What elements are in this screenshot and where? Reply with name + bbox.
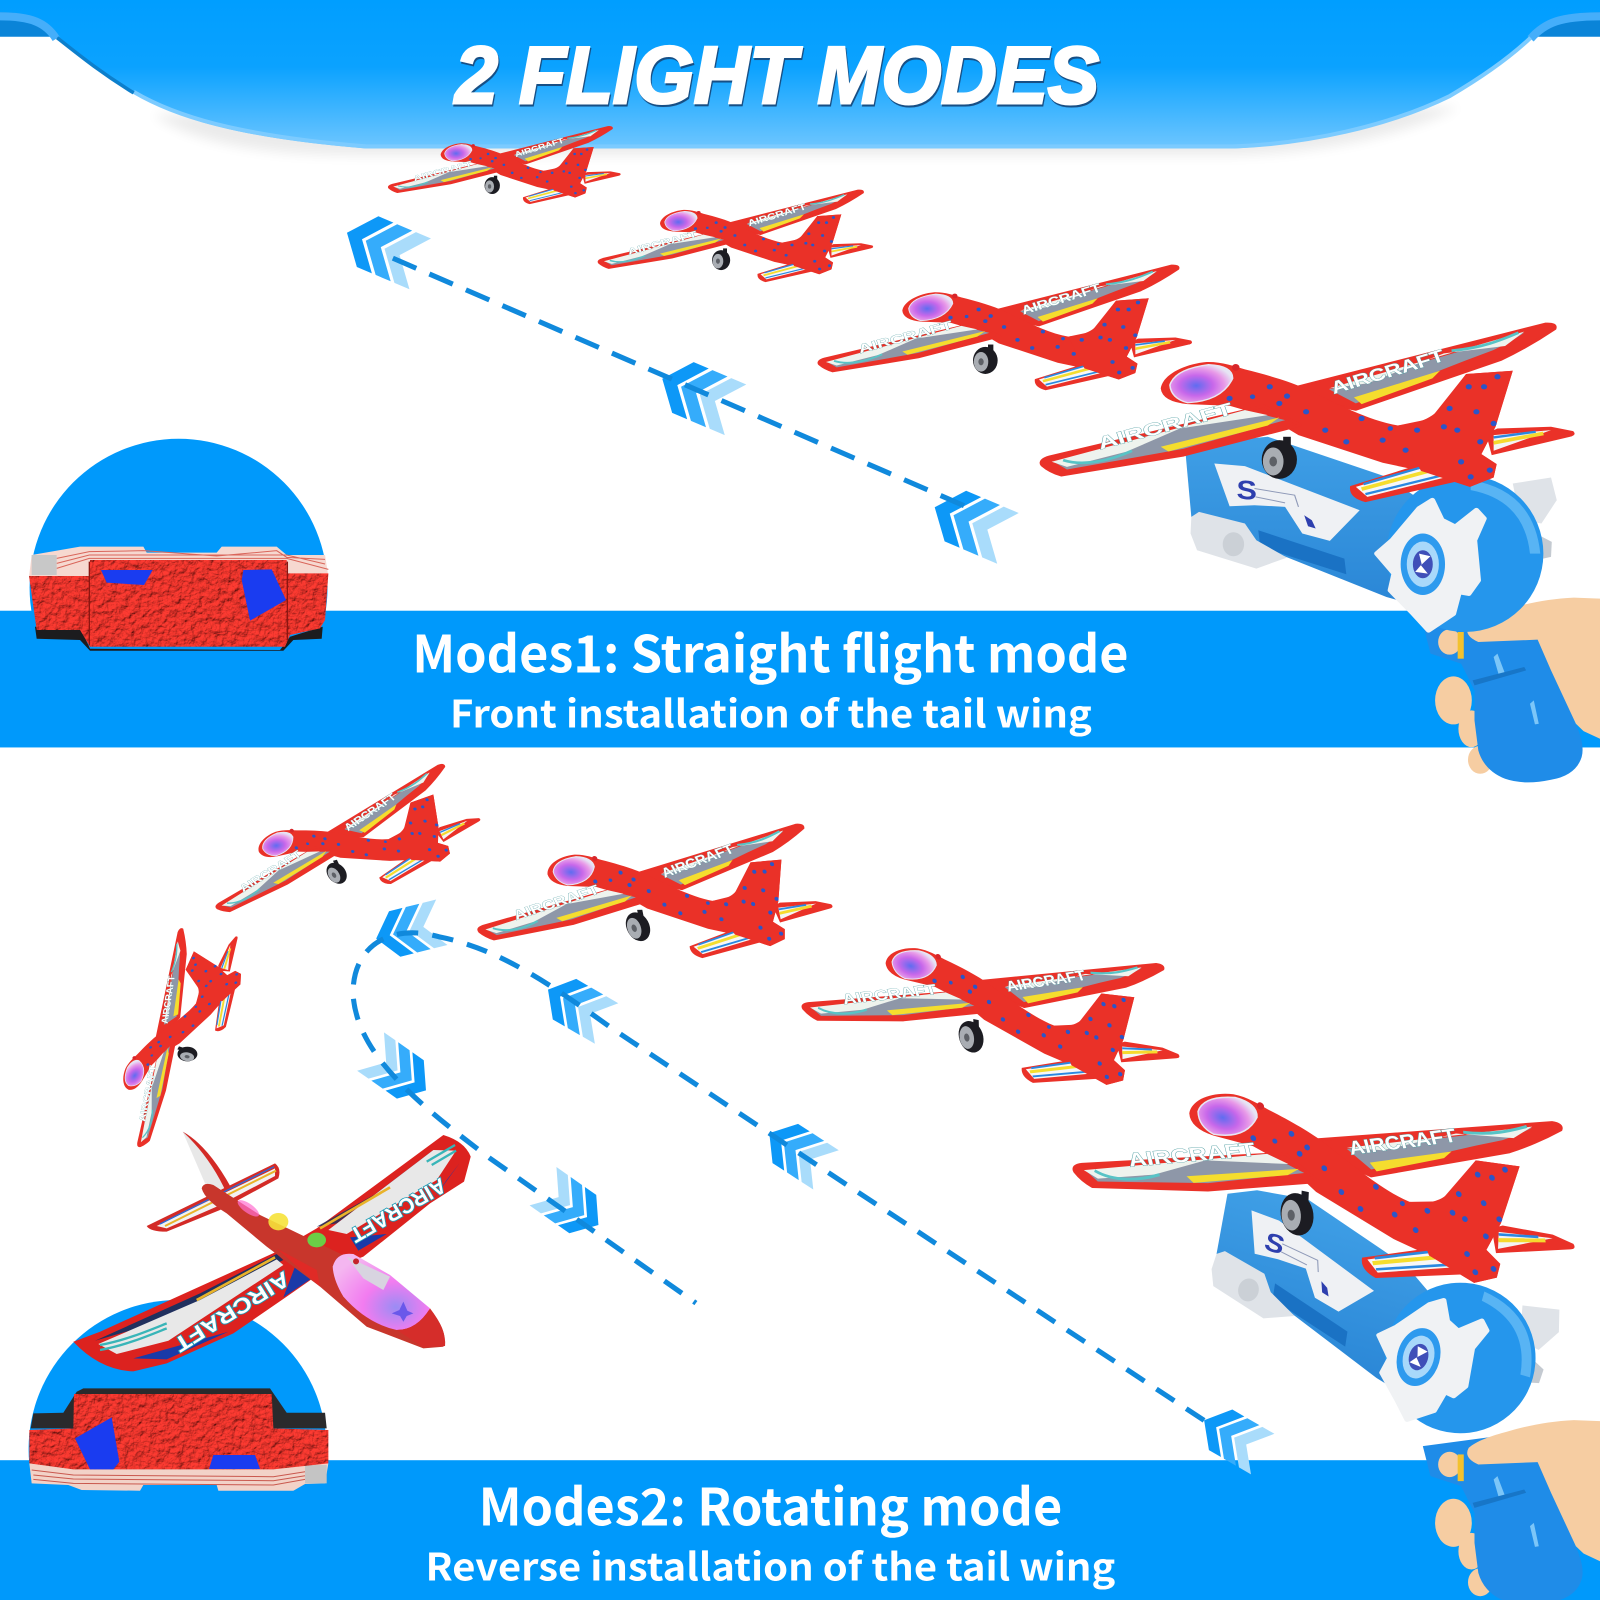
mode 2 launcher barrel	[1182, 1178, 1575, 1454]
mode 1 heading: Modes1: Straight flight mode	[412, 613, 1129, 687]
title: 2 FLIGHT MODES	[453, 31, 1099, 121]
arrow: mode 2 launch end	[1192, 1400, 1274, 1474]
mode 1 blue semicircle	[30, 439, 328, 737]
mode 2 plane third	[800, 895, 1181, 1111]
mode 2 plane underside view: AIRCRAFT	[170, 1266, 294, 1357]
mode 1 banner	[0, 611, 1600, 747]
mode 2 dashed flight path	[353, 933, 1204, 1420]
mode 2 banner	[0, 1460, 1600, 1600]
arrow: mode 1 middle	[652, 353, 746, 435]
arrow: mode 2 middle	[757, 1113, 839, 1190]
header banner	[0, 0, 1600, 155]
arrow: mode 1 end	[924, 482, 1019, 564]
mode 1 plane far	[389, 127, 621, 204]
mode 2 heading: Modes2: Rotating mode	[479, 1467, 1062, 1541]
mode 2 plane on launcher	[1072, 1019, 1580, 1321]
arrow: mode 2 return upper	[357, 1032, 439, 1110]
mode 2 blue semicircle	[29, 1300, 327, 1598]
mode 1 tail wing close-up	[29, 547, 328, 651]
arrow: mode 2 top turn	[371, 899, 447, 961]
mode 2 launcher grip and hand	[1423, 1420, 1600, 1600]
mode 2 plane underside view	[73, 1132, 471, 1371]
mode 1 plane third	[819, 266, 1192, 390]
arrow: mode 2 return lower	[530, 1167, 612, 1244]
arrow: mode 1 start	[336, 207, 431, 289]
mode 2 tail wing close-up	[29, 1388, 328, 1491]
mode 1 launcher and hand	[1186, 437, 1600, 782]
mode 2 subheading: Reverse installation of the tail wing	[426, 1537, 1115, 1592]
mode 1 plane on launcher	[1041, 324, 1575, 502]
arrow: mode 2 upper	[536, 969, 618, 1044]
mode 1 subheading: Front installation of the tail wing	[450, 684, 1092, 739]
mode 1 plane second	[598, 190, 873, 282]
mode 1 dashed flight path	[393, 258, 974, 510]
mode 2 plane turning	[73, 921, 270, 1152]
mode 2 plane underside view: AIRCRAFT	[346, 1173, 450, 1247]
mode 2 plane second	[457, 825, 843, 960]
mode 2 plane top	[182, 761, 497, 928]
